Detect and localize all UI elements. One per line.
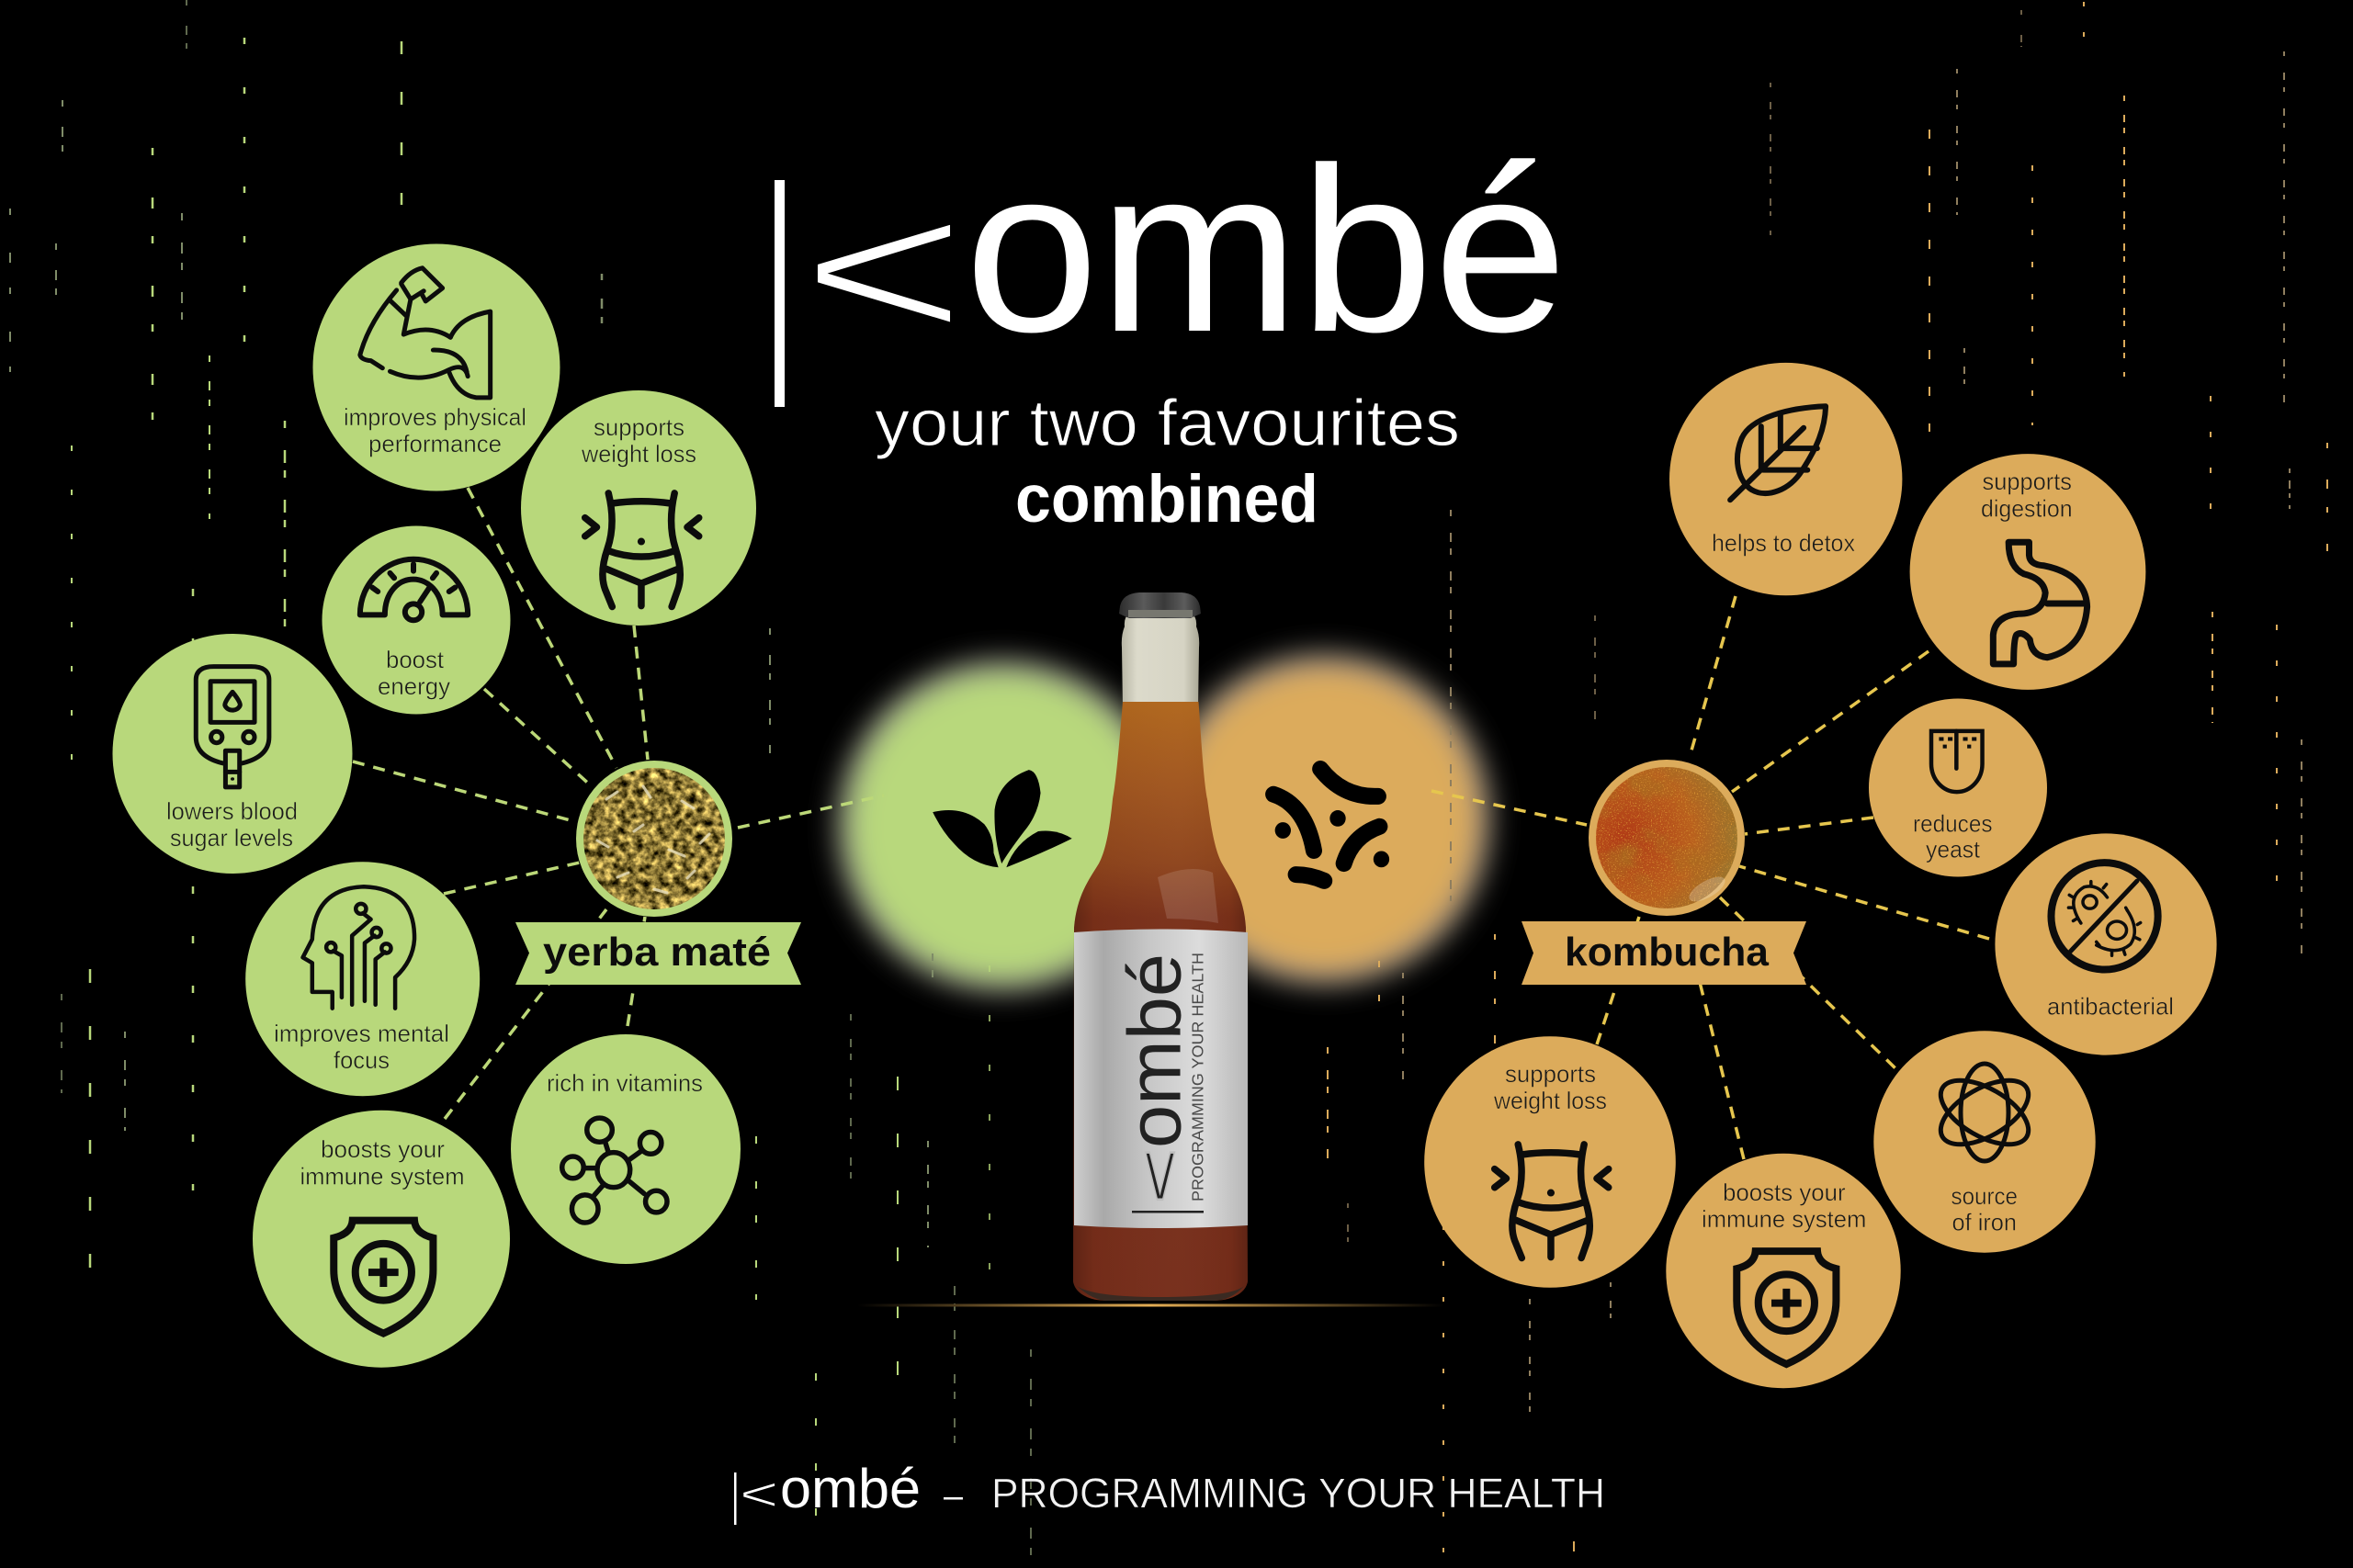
benefit: boosts your immune system: immune system [300,1163,465,1190]
benefit: supports weight loss: supports [1505,1060,1596,1088]
benefit: supports weight loss: weight loss [1493,1087,1607,1114]
tagline: your two favourites: your two favourites [875,388,1460,460]
benefit: antibacterial: antibacterial [2047,992,2174,1020]
connectors: kombucha dashed lines [1431,596,1989,1159]
title logo: kombé: ombé [965,119,1567,381]
ingredient photo: yerba maté [576,761,732,917]
benefit: supports digestion: supports [1983,468,2072,495]
benefit: supports digestion: digestion [1981,495,2073,523]
icon: yeast [1931,731,1983,792]
panel: kombucha benefits [1424,363,2217,1388]
benefit: lowers blood sugar levels: sugar levels [170,824,293,852]
glow: kombucha orange circle [1158,652,1492,987]
bottle of kombé [1073,592,1248,1301]
benefit: reduces yeast: yeast [1926,836,1981,863]
benefit: source of iron: of iron [1951,1209,2017,1236]
benefit: rich in vitamins [511,1034,741,1264]
bottle label: ombé [1114,953,1196,1148]
bottle cap [1119,592,1201,618]
benefit: helps to detox: helps to detox [1712,529,1855,557]
icon: shield with cross [1736,1251,1836,1364]
footer dash: – [944,1477,964,1516]
benefit: boost energy [322,525,511,715]
benefit: source of iron [1873,1031,2096,1253]
icon: waist [1495,1145,1609,1258]
footer logo: kombé [734,1458,921,1525]
benefit: reduces yeast [1869,698,2047,876]
banner: kombucha: kombucha [1565,930,1770,975]
benefit: improves mental focus [245,862,480,1096]
footer logo: kombé: ombé [780,1458,921,1519]
bottle label: < [1128,1147,1192,1204]
benefit: improves physical performance: performance [368,430,502,457]
benefit: supports weight loss: weight loss [581,440,696,468]
tagline: combined: combined [1015,462,1318,536]
benefit: supports digestion [1910,454,2145,690]
ingredient photo: kombucha [1589,760,1745,916]
bottle neck glass [1122,614,1199,707]
benefit: reduces yeast: reduces [1913,810,1992,838]
footer logo: kombé: < [740,1468,778,1520]
icon: no bacteria [2051,863,2158,970]
bottle liquid body [1073,702,1248,1301]
benefit: boosts your immune system: boosts your [1723,1179,1846,1206]
benefit: lowers blood sugar levels [112,634,353,874]
glow: yerba maté green circle [836,659,1171,993]
benefit: boosts your immune system: boosts your [321,1135,445,1163]
benefit: improves physical performance: improves physical [344,403,526,431]
icon: stomach [1993,542,2087,664]
bottle label: PROGRAMMING YOUR HEALTH [1189,953,1207,1201]
icon: bacteria on orange glow [1273,769,1389,881]
banner: kombucha [1522,921,1806,985]
icon: leaf [1730,406,1826,500]
benefit: boost energy: boost [386,646,445,673]
icon: molecule [562,1118,667,1223]
benefit: antibacterial [1995,833,2217,1055]
title logo: kombé [775,119,1567,407]
benefit: improves mental focus: focus [334,1046,390,1074]
benefit: boosts your immune system [253,1111,510,1368]
benefit: source of iron: source [1951,1182,2018,1210]
benefit: rich in vitamins: rich in vitamins [547,1069,703,1097]
title logo: kombé: < [801,157,967,383]
benefit: boost energy: energy [378,672,450,700]
icon: head with circuits [303,886,414,1009]
panel: yerba maté benefits [112,244,801,1368]
connectors: yerba maté dashed lines [353,488,884,1119]
banner: yerba maté [515,922,801,985]
icon: gauge [360,559,468,620]
benefit: improves physical performance [312,244,560,491]
benefit: supports weight loss [521,390,756,626]
icon: leaves on green glow [933,770,1072,867]
icon: atom [1930,1064,2039,1161]
benefit: boosts your immune system: immune system [1702,1205,1866,1233]
icon: glucose meter [196,667,269,787]
benefit: boosts your immune system [1666,1154,1901,1388]
benefit: improves mental focus: improves mental [274,1020,449,1047]
ground line under bottle [857,1304,1444,1306]
banner: yerba maté: yerba maté [543,930,771,975]
benefit: lowers blood sugar levels: lowers blood [166,797,298,825]
benefit: supports weight loss [1424,1036,1676,1288]
benefit: helps to detox [1669,363,1902,595]
footer tagline: programming your health: PROGRAMMING YOUR HEALTH [991,1470,1605,1517]
bottle label [1074,930,1248,1228]
benefit: supports weight loss: supports [594,413,684,441]
icon: flexed arm [360,268,491,398]
icon: shield with cross [334,1221,433,1334]
icon: waist [585,493,699,607]
